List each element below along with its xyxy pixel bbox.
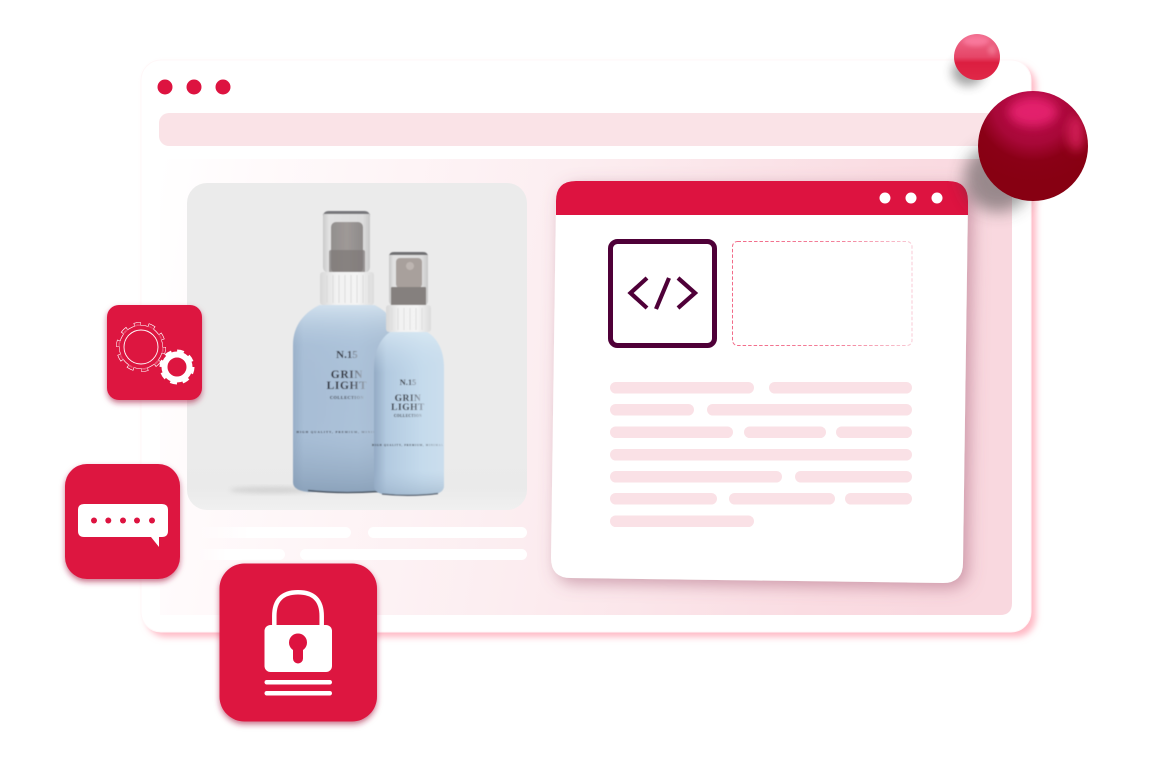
bottle label text: COLLECTION — [330, 395, 364, 400]
bottle label text: GRIN — [395, 394, 421, 404]
text placeholder lines — [610, 382, 912, 527]
address bar — [159, 113, 1004, 146]
card header dots — [880, 192, 942, 204]
panel: product photo — [187, 183, 527, 510]
panel: code editor card — [551, 181, 968, 583]
caption placeholder lines — [195, 527, 527, 560]
bottle label text: GRIN — [331, 369, 363, 381]
large sphere — [964, 91, 1088, 212]
card header bar — [556, 181, 968, 215]
dashed placeholder box — [732, 242, 912, 346]
small sphere — [952, 34, 1000, 86]
icon: gears tile — [107, 305, 202, 400]
small bottle — [372, 252, 444, 495]
bottle label text: LIGHT — [327, 380, 367, 392]
icon: padlock tile — [220, 564, 377, 722]
bottle label text — [372, 377, 444, 447]
bottle label text: LIGHT — [391, 403, 425, 413]
bottle label text: N.15 — [400, 377, 416, 387]
icon: chat bubble tile — [65, 464, 180, 579]
bottle label text — [297, 349, 383, 434]
bottle label text: N.15 — [336, 349, 358, 361]
bottle label text: HIGH QUALITY, PREMIUM, MINIMAL — [297, 430, 383, 434]
bottle label text: HIGH QUALITY, PREMIUM, MINIMAL — [372, 444, 444, 447]
window control dots — [158, 80, 230, 94]
inner content panel — [160, 159, 1012, 615]
icon: code brackets — [610, 242, 714, 346]
main browser window — [141, 60, 1036, 637]
bottle label text: COLLECTION — [394, 414, 422, 418]
large bottle — [293, 211, 400, 493]
